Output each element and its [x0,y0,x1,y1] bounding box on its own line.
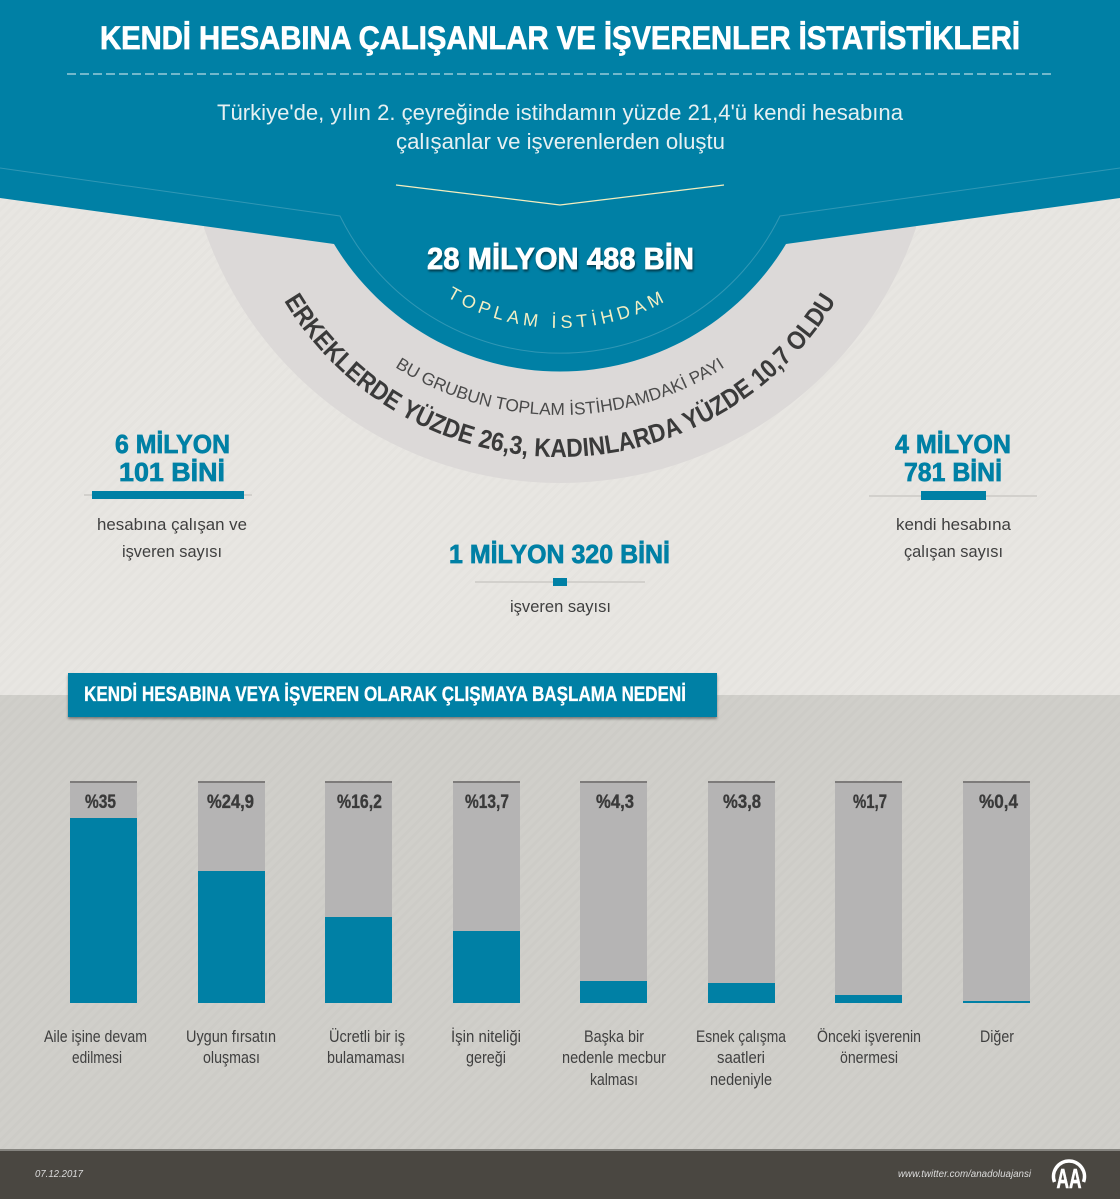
chevron divider [396,185,724,205]
bar chart [44,781,1030,1089]
stat: self-employed and employers [84,429,252,561]
curved share label: BU GRUBUN TOPLAM İSTİHDAMDAKİ PAYI [396,358,724,415]
bar: %3,8: nedeniyle [710,1070,772,1089]
bar: %1,7: önermesi [840,1048,898,1067]
stat: employers [449,539,670,616]
title: KENDİ HESABINA ÇALIŞANLAR VE İŞVERENLER İSTATİSTİKLERİ [100,20,1020,56]
stat: self-employed: 4 MİLYON [895,429,1011,459]
stat: self-employed: çalışan sayısı [904,542,1003,561]
bar: %3,8: Esnek çalışma [696,1027,786,1046]
bar: %13,7: gereği [466,1048,506,1067]
bar: %0,4: %0,4 [979,792,1018,813]
total employment number: 28 MİLYON 488 BİN [427,241,694,276]
bar: %16,2: Ücretli bir iş [329,1027,405,1046]
subtitle: Türkiye'de, yılın 2. çeyreğinde istihdamın yüzde 21,4'ü kendi hesabına [217,100,904,125]
bar: %24,9: Uygun fırsatın [186,1027,276,1046]
teal header banner [0,0,1120,372]
bar: %1,7: Önceki işverenin [817,1027,921,1046]
grey semicircle panel [204,180,916,483]
bar: %35: edilmesi [72,1048,122,1067]
bar: %24,9: oluşması [203,1048,260,1067]
title divider [67,73,1054,75]
bar: %24,9 [186,781,276,1067]
icon: AA logo [1054,1161,1085,1194]
stat: employers: işveren sayısı [510,597,611,616]
stat: self-employed and employers: işveren sayısı [122,542,222,561]
bar: %0,4 [963,781,1030,1046]
icon: AA logo: AA [1056,1163,1082,1194]
bar: %3,8 [696,781,786,1089]
stat: self-employed: 781 BİNİ [904,457,1002,487]
section heading [68,673,717,717]
bar: %16,2: bulamaması [327,1048,405,1067]
stat: self-employed and employers: hesabına çalışan ve [97,515,247,534]
curved share values: ERKEKLERDE YÜZDE 26,3, KADINLARDA YÜZDE 10,7 OLDU [284,292,834,459]
banner outline [0,168,1120,353]
bar: %4,3: %4,3 [596,792,634,813]
bar: %1,7 [817,781,921,1067]
subtitle [217,100,904,154]
footer bar [0,1150,1120,1199]
bar: %35: %35 [85,792,116,813]
footer twitter link: www.twitter.com/anadoluajansi [898,1169,1032,1180]
stat: employers: 1 MİLYON 320 BİNİ [449,539,670,569]
bar: %4,3: Başka bir [584,1027,644,1046]
bar: %4,3: nedenle mecbur [562,1048,666,1067]
bar: %3,8: %3,8 [723,792,761,813]
bar: %16,2 [325,781,405,1067]
bar: %35: Aile işine devam [44,1027,147,1046]
bar: %4,3 [562,781,666,1089]
stat: self-employed [869,429,1037,561]
total employment label: TOPLAM İSTİHDAM [450,286,664,328]
subtitle: çalışanlar ve işverenlerden oluştu [396,129,725,154]
bar: %13,7 [451,781,521,1067]
footer date: 07.12.2017 [35,1169,83,1180]
bar: %13,7: İşin niteliği [451,1027,521,1046]
bar: %0,4: Diğer [980,1027,1014,1046]
section heading: KENDİ HESABINA VEYA İŞVEREN OLARAK ÇLIŞMAYA BAŞLAMA NEDENİ [84,683,686,706]
bar: %13,7: %13,7 [465,792,509,813]
bar: %24,9: %24,9 [207,792,254,813]
stat: self-employed and employers: 6 MİLYON [115,429,230,459]
bar: %35 [44,781,147,1067]
bar: %1,7: %1,7 [853,792,887,813]
bar: %3,8: saatleri [717,1048,765,1067]
bar: %4,3: kalması [590,1070,638,1089]
stat: self-employed: kendi hesabına [896,515,1012,534]
bar: %16,2: %16,2 [337,792,382,813]
stat: self-employed and employers: 101 BİNİ [119,457,225,487]
